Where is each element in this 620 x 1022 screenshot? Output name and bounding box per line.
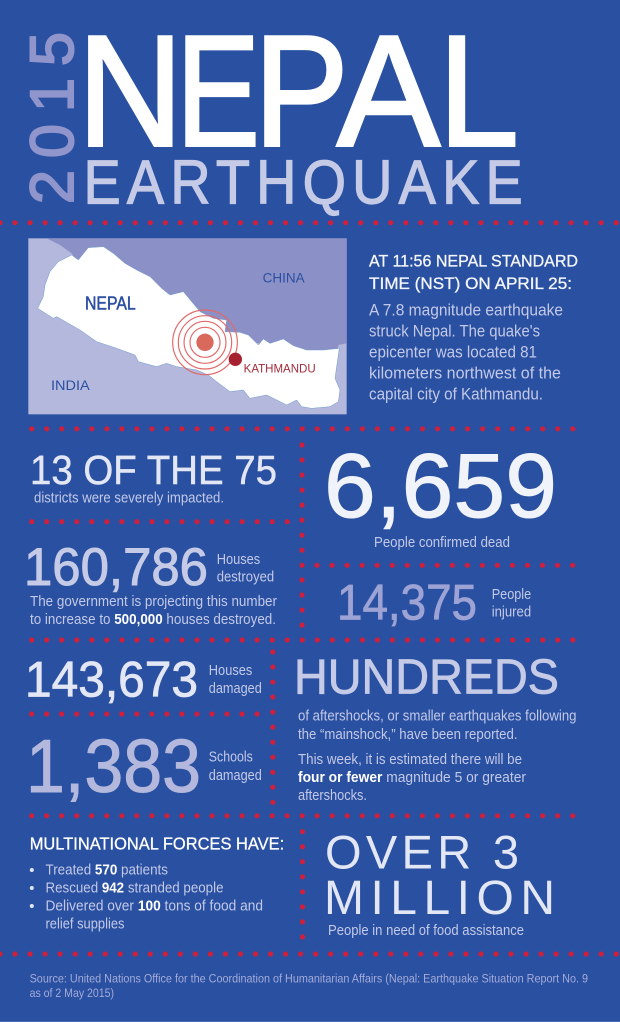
heading NEPAL: L xyxy=(438,4,519,180)
bullet list: relief supplies xyxy=(46,916,124,933)
epicenter rings xyxy=(173,310,237,375)
stat: hundreds of aftershocks: aftershocks. xyxy=(298,787,367,804)
stat: hundreds of aftershocks: the “mainshock,” have been reported. xyxy=(298,726,518,743)
stat: over 3 million xyxy=(324,826,555,939)
intro text block: epicenter was located 81 xyxy=(369,342,537,361)
year rotated: 2015 xyxy=(18,32,86,204)
panel: multinational forces xyxy=(30,833,284,933)
heading NEPAL: N xyxy=(78,3,183,180)
stat: 13 of the 75 districts: districts were severely impacted. xyxy=(34,490,224,507)
map label China: CHINA xyxy=(263,269,305,285)
bullet list: Delivered over 100 tons of food and xyxy=(46,898,263,915)
stat: 14,375 people injured: People xyxy=(492,586,531,603)
intro heading: AT 11:56 NEPAL STANDARD xyxy=(369,252,578,271)
map label Kathmandu: KATHMANDU xyxy=(244,362,316,376)
map label Nepal: NEPAL xyxy=(85,292,136,313)
Kathmandu marker xyxy=(229,353,242,366)
stat: hundreds of aftershocks: HUNDREDS xyxy=(294,650,559,704)
bullet list: Treated 570 patients xyxy=(46,862,168,879)
heading NEPAL: E xyxy=(176,4,260,180)
stat: 1,383 schools damaged: Schools xyxy=(209,749,253,766)
stat: 13 of the 75 districts: 13 OF THE 75 xyxy=(30,447,277,493)
intro text block: kilometers northwest of the xyxy=(369,363,561,382)
Nepal territory xyxy=(38,247,340,408)
intro text block xyxy=(369,252,578,403)
heading NEPAL xyxy=(78,2,519,180)
stat: hundreds of aftershocks: of aftershocks, or smaller earthquakes following xyxy=(298,708,576,725)
stat: 160,786 houses destroyed: to increase to 500,000 houses destroyed. xyxy=(30,611,276,628)
bullet list xyxy=(30,862,263,933)
heading NEPAL: P xyxy=(254,2,349,179)
map of Nepal xyxy=(28,238,347,414)
stat: 160,786 houses destroyed xyxy=(24,538,277,628)
stat: 14,375 people injured: 14,375 xyxy=(337,574,477,630)
stat: 160,786 houses destroyed: Houses xyxy=(217,551,260,568)
stat: 160,786 houses destroyed: destroyed xyxy=(217,569,274,586)
title: 2015 Nepal Earthquake xyxy=(18,2,523,217)
stat: hundreds of aftershocks: This week, it is estimated there will be xyxy=(298,751,522,768)
stat: 160,786 houses destroyed: The government is projecting this number xyxy=(30,593,277,610)
intro text block: struck Nepal. The quake's xyxy=(369,322,540,341)
source note xyxy=(30,972,588,1000)
stat: hundreds of aftershocks: four or fewer magnitude 5 or greater xyxy=(298,769,526,786)
stat: 14,375 people injured: injured xyxy=(492,604,531,621)
intro text block: capital city of Kathmandu. xyxy=(369,384,543,403)
intro text block: TIME (NST) ON APRIL 25: xyxy=(369,274,572,293)
heading NEPAL: A xyxy=(337,4,440,180)
panel heading: MULTINATIONAL FORCES HAVE: xyxy=(30,833,284,853)
stat: over 3 million: MILLION xyxy=(324,872,555,925)
heading EARTHQUAKE: EARTHQUAKE xyxy=(84,149,523,217)
stat: 143,673 houses damaged: damaged xyxy=(209,680,262,697)
stat: 1,383 schools damaged: 1,383 xyxy=(26,724,201,808)
stat: 143,673 houses damaged: Houses xyxy=(209,662,252,679)
stat: 160,786 houses destroyed: 160,786 xyxy=(24,538,208,597)
stat: 1,383 schools damaged: damaged xyxy=(209,767,262,784)
map label India: INDIA xyxy=(51,377,90,393)
bullet list: Rescued 942 stranded people xyxy=(46,880,224,897)
stat: 143,673 houses damaged: 143,673 xyxy=(25,652,198,708)
source note: as of 2 May 2015) xyxy=(30,986,114,1000)
stat: over 3 million: People in need of food assistance xyxy=(328,922,524,939)
stat: 6,659 people confirmed dead: 6,659 xyxy=(324,436,557,537)
stat: hundreds of aftershocks xyxy=(294,650,576,804)
stat: 6,659 people confirmed dead: People confirmed dead xyxy=(374,534,510,551)
intro body: A 7.8 magnitude earthquake xyxy=(369,301,563,320)
stat: over 3 million: OVER 3 xyxy=(325,826,519,878)
